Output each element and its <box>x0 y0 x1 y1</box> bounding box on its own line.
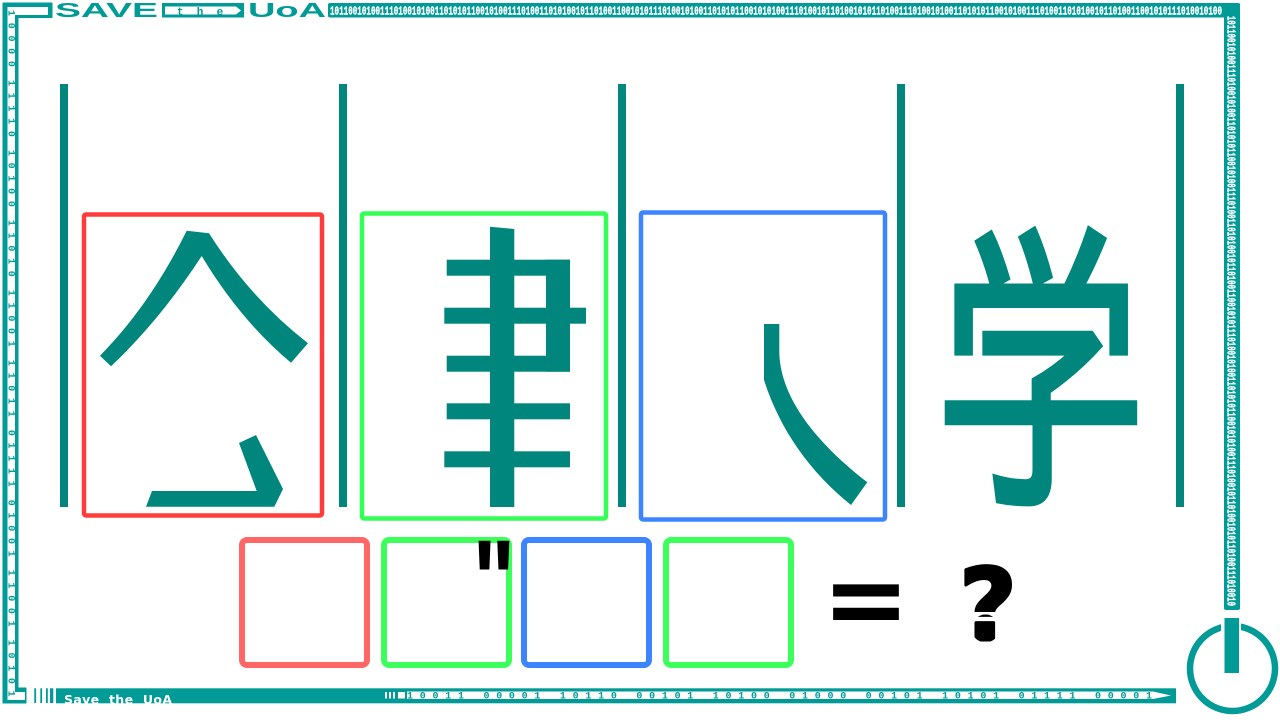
answer box 1 <box>242 540 367 665</box>
puzzle fragment: strokes in green frame <box>444 227 586 507</box>
blue frame <box>641 212 885 520</box>
answer box 4 <box>666 540 791 665</box>
title: the arrow box <box>162 3 244 19</box>
puzzle fragment: stroke in blue frame <box>764 324 867 505</box>
frame: top-left and left binary strip <box>3 3 52 703</box>
character: 学: 学 <box>936 209 1146 521</box>
title: SAVE: SAVE <box>55 0 158 22</box>
answer box 3 <box>524 540 649 665</box>
icon: power button <box>1190 612 1275 711</box>
question mark: ? <box>959 547 1017 664</box>
answer box 2 <box>384 540 509 665</box>
green frame <box>362 214 606 518</box>
column divider lines <box>60 84 1184 507</box>
title: UoA: UoA <box>248 0 326 22</box>
frame: bottom label Save the UoA: Save the UoA <box>64 692 172 707</box>
puzzle fragment: strokes in red frame <box>100 231 308 507</box>
frame: bottom bar ticks <box>34 688 53 703</box>
red frame <box>84 214 322 516</box>
frame: bottom bar with binary arrow: 1 0 0 1 1 0 0 0 0 1 1 0 1 1 0 0 0 1 0 1 1 0 1 0 0 0 1 0 0 0 0 0 1 0 1 1 0 1 0 1 0 1 1 1 1 0 0 0 0 1 <box>407 692 1152 702</box>
frame: top-left and left binary strip: 1 0 0 0 0 1 1 1 1 0 1 0 1 0 0 1 1 0 1 0 1 1 0 0 1 1 1 0 1 1 0 1 1 1 1 0 1 0 0 1 1 1 0 0 1 1 0 1 0 1 <box>4 10 16 697</box>
frame: bottom bar with binary arrow <box>56 688 1176 703</box>
equals sign: = <box>822 538 910 660</box>
dakuten mark: " <box>473 516 515 645</box>
title: the arrow box: t h e <box>177 7 224 19</box>
